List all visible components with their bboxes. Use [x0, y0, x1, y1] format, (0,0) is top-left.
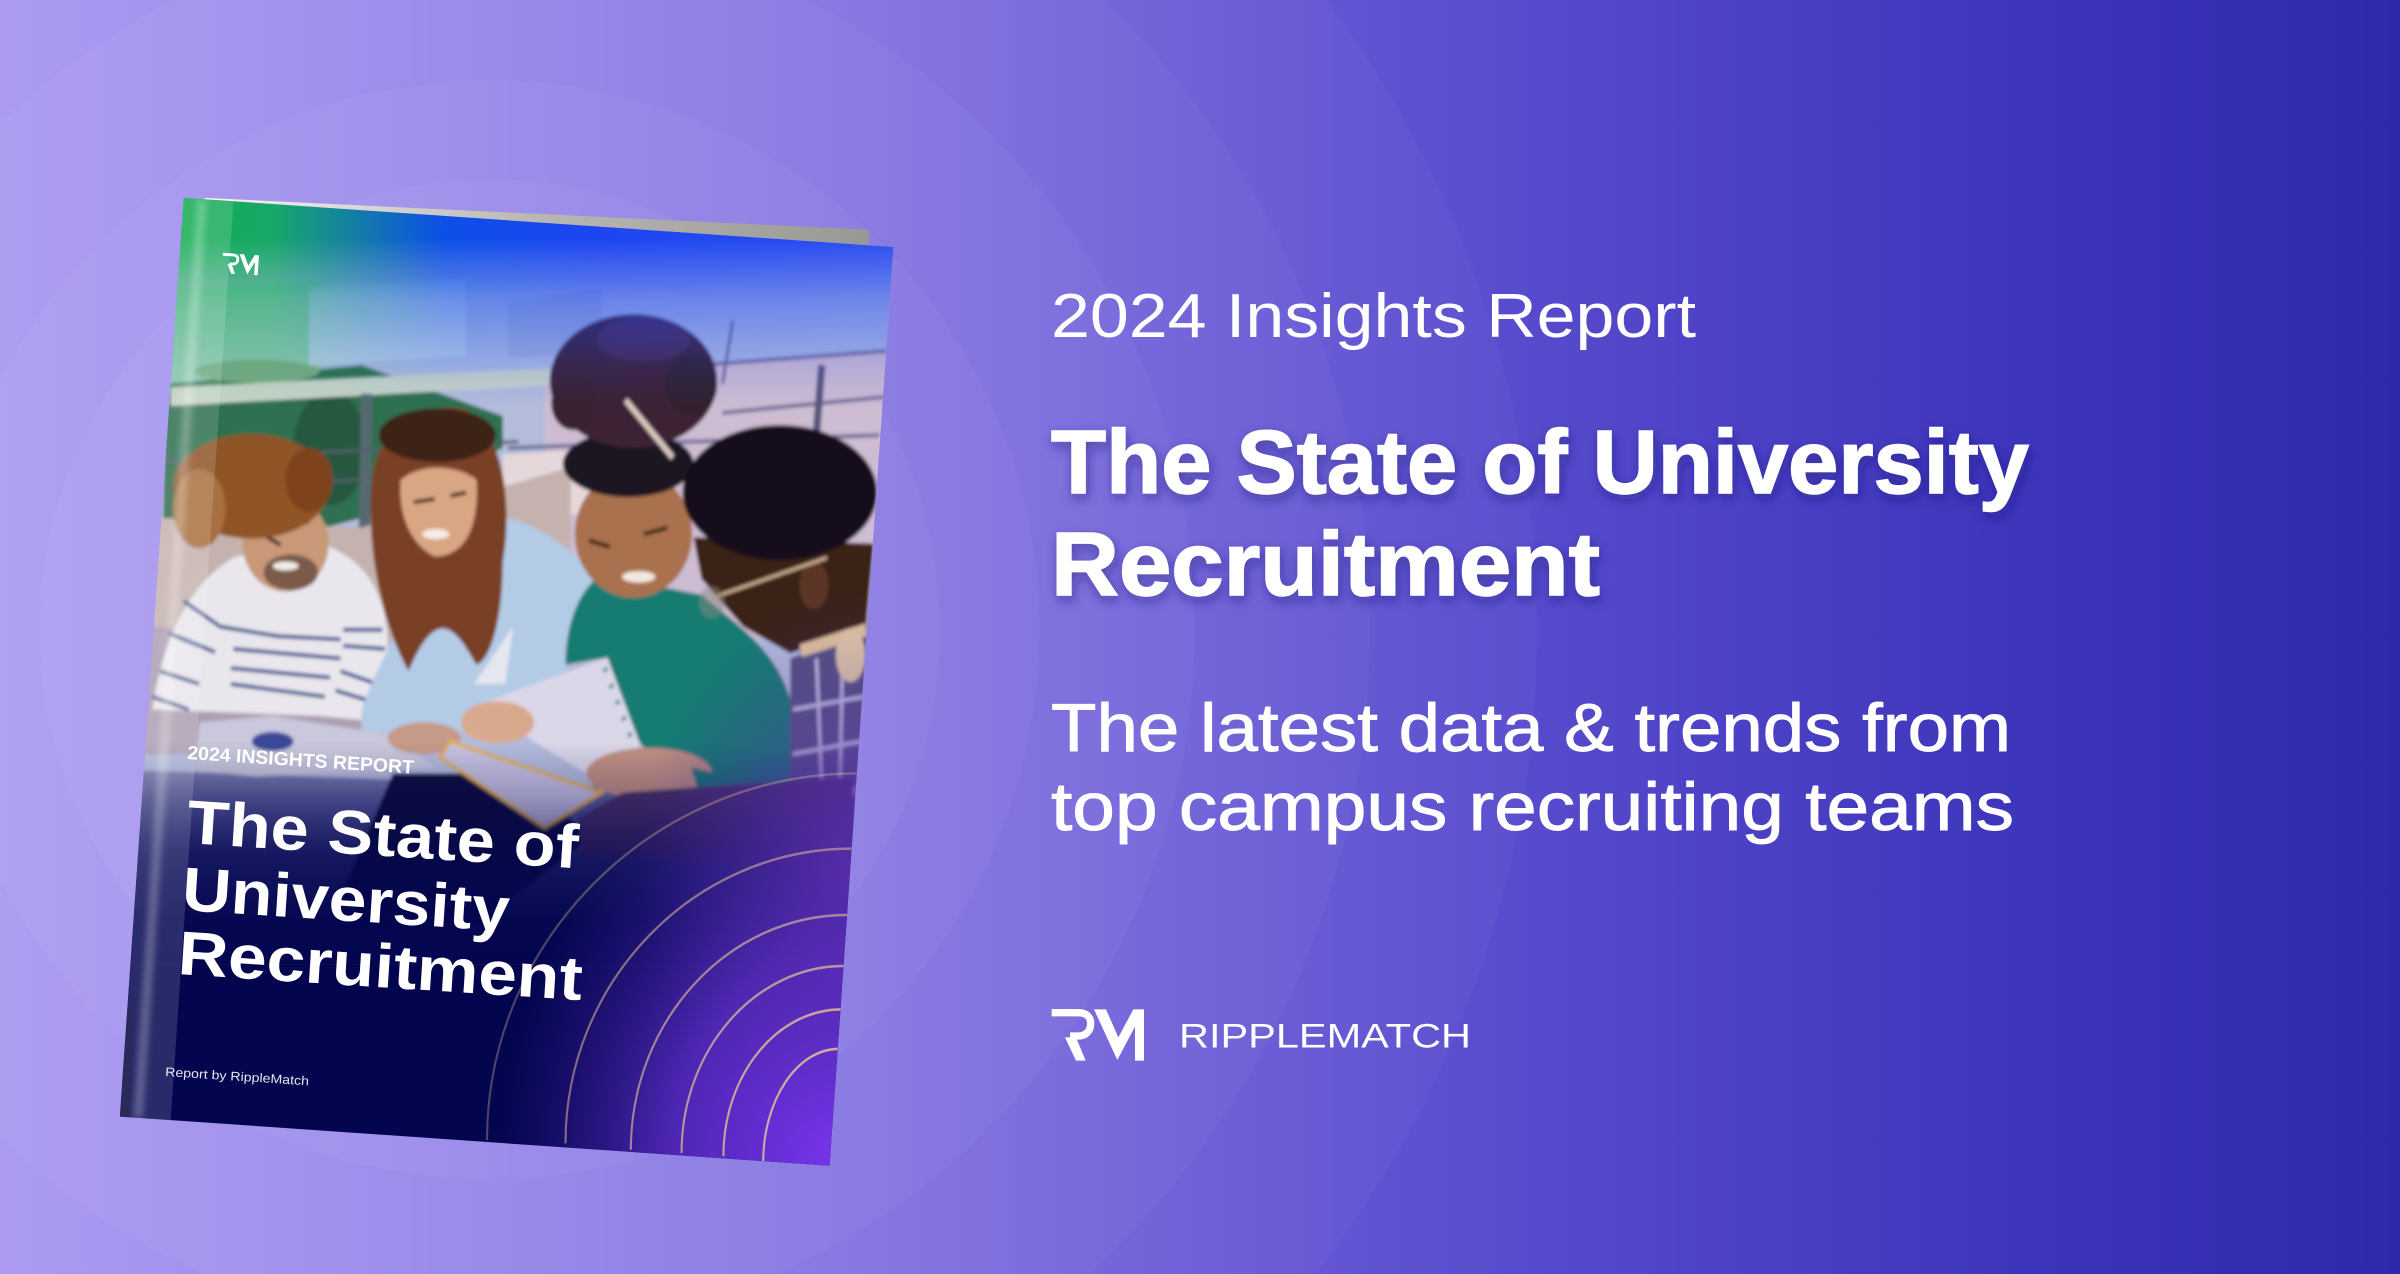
hands	[388, 722, 461, 754]
eyebrow heading: 2024 Insights Report	[1051, 282, 1696, 351]
subtitle: The latest data & trends from	[1051, 690, 2011, 766]
purple glows	[520, 772, 856, 1166]
jeans and lower bodies	[121, 770, 858, 1086]
subtitle	[1051, 690, 2014, 845]
ripple arcs	[487, 773, 858, 1163]
main title: Recruitment	[1051, 515, 1600, 615]
loose sheet	[488, 654, 642, 774]
man with curly hair	[152, 544, 388, 722]
cover title: The State of	[185, 788, 581, 882]
main title	[1051, 413, 2029, 615]
notebook	[194, 716, 435, 777]
cover title	[176, 788, 585, 1014]
page edge behind cover	[205, 198, 869, 245]
wordmark: RIPPLEMATCH	[1179, 1018, 1471, 1056]
cover eyebrow: 2024 INSIGHTS REPORT	[187, 743, 415, 779]
report cover mockup	[116, 180, 900, 1169]
forearm	[578, 776, 854, 855]
woman in teal sweater	[565, 576, 796, 802]
cover title: University	[180, 855, 512, 945]
cover artwork	[116, 180, 900, 1169]
cover byline: Report by RippleMatch	[165, 1065, 309, 1088]
cover title: Recruitment	[176, 919, 585, 1014]
subtitle: top campus recruiting teams	[1051, 769, 2014, 845]
man with glasses	[790, 627, 869, 796]
icon: RM mark	[1052, 1009, 1144, 1061]
top colour wash	[171, 198, 894, 394]
yellow folder	[440, 741, 602, 828]
woman with long hair	[362, 518, 602, 732]
navy fade	[130, 750, 856, 965]
main title: The State of University	[1051, 413, 2029, 513]
RippleMatch logo	[1052, 1009, 1471, 1061]
spine highlight	[120, 198, 233, 1120]
cover logo RM	[222, 253, 259, 275]
cover photo: students reading	[116, 193, 900, 1086]
